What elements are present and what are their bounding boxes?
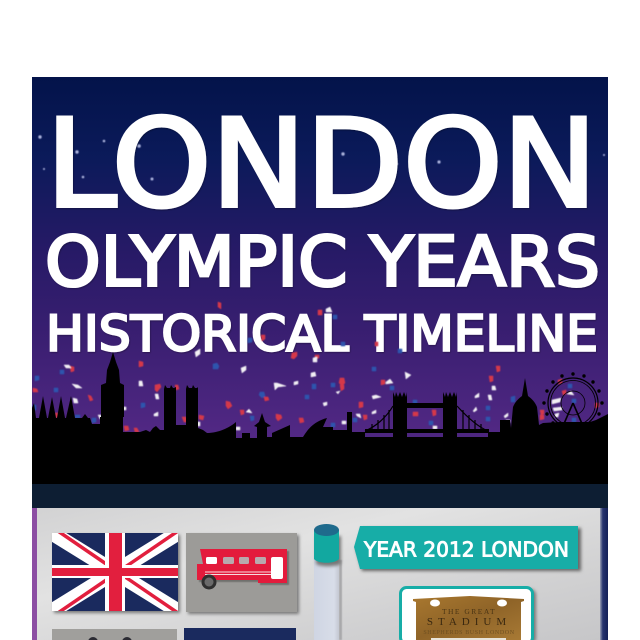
title: LONDON: LONDON xyxy=(46,94,597,235)
year ribbon: 2012 London xyxy=(354,526,581,571)
photo card: the great stadium sign: THE GREAT xyxy=(442,607,496,616)
bus body xyxy=(197,549,289,585)
photo card: the great stadium sign: STADIUM xyxy=(427,616,511,628)
dark footer band xyxy=(32,484,608,508)
year ribbon: 2012 London: YEAR 2012 LONDON xyxy=(363,538,569,562)
st paul's and east skyline xyxy=(500,378,608,433)
tower bridge deck stripes xyxy=(365,433,488,437)
lower tile: navy xyxy=(184,628,296,640)
infographic canvas xyxy=(32,77,608,640)
panel: night sky header xyxy=(32,77,608,485)
bus wheel xyxy=(202,574,216,590)
confetti xyxy=(33,302,599,432)
lower tile: grey icon xyxy=(52,629,177,640)
stars xyxy=(38,135,605,180)
bus windows xyxy=(205,557,283,579)
photo card: the great stadium sign: SHEPHERDS BUSH LONDON xyxy=(423,630,515,636)
heading: OLYMPIC YEARS: OLYMPIC YEARS xyxy=(45,222,600,302)
timeline pillar xyxy=(314,524,342,640)
icon: union jack flag xyxy=(52,527,180,617)
tower bridge cables xyxy=(365,406,488,431)
icon: red bus tile xyxy=(186,533,299,614)
london eye xyxy=(542,372,604,428)
heading: HISTORICAL TIMELINE: HISTORICAL TIMELINE xyxy=(46,305,598,362)
skyline silhouette xyxy=(32,352,608,485)
tower bridge xyxy=(365,392,489,437)
panel: timeline content xyxy=(32,508,608,640)
ground and western buildings xyxy=(32,352,608,485)
photo card: the great stadium sign xyxy=(400,588,536,640)
